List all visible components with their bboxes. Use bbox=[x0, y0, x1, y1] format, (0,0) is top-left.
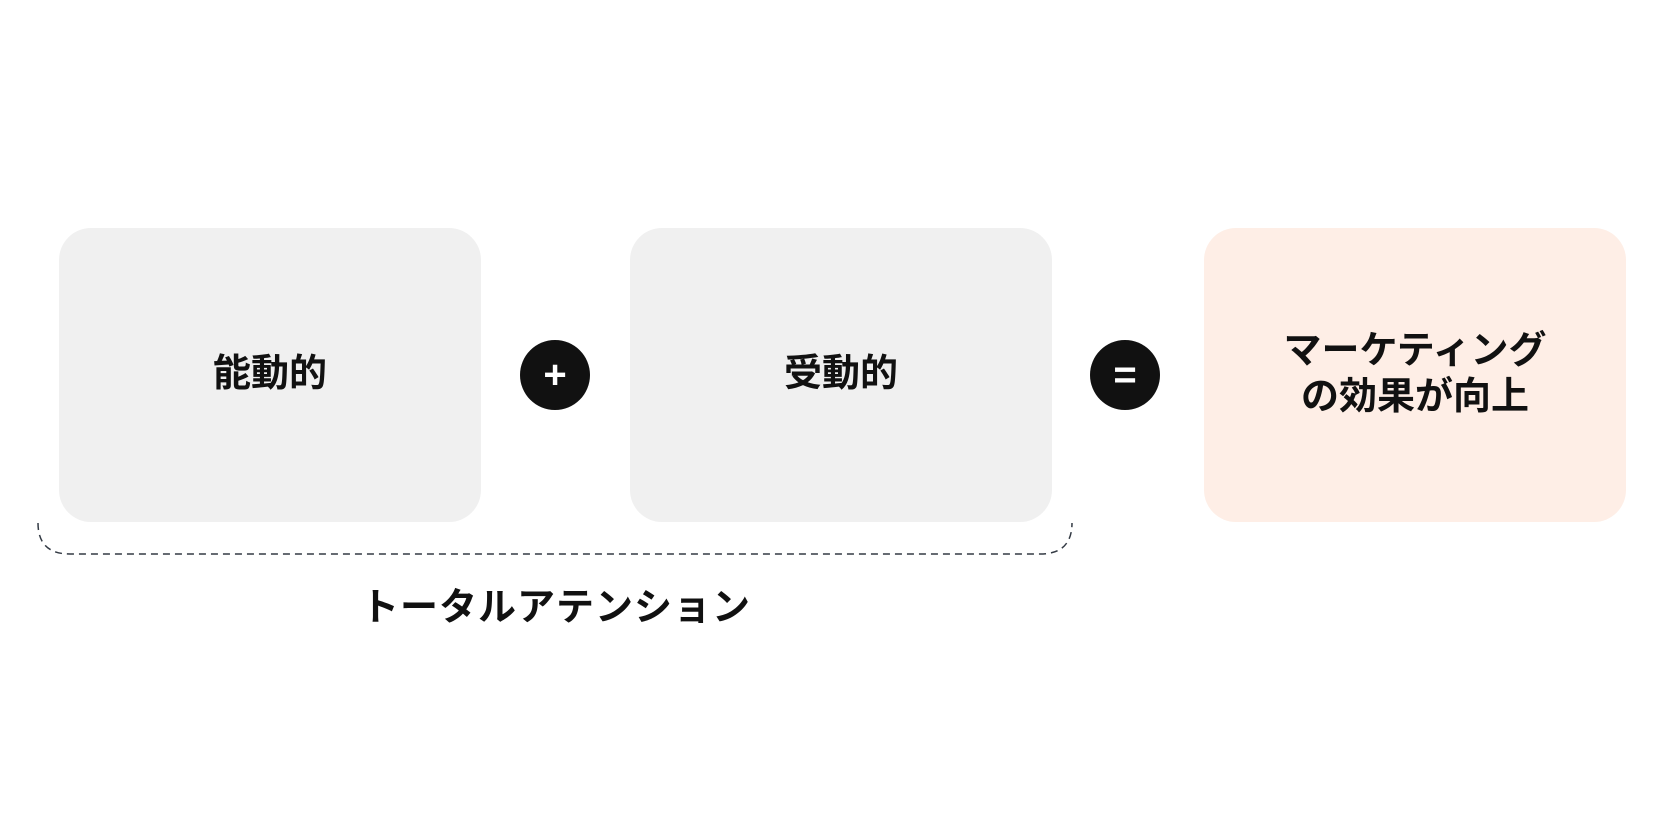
panel: passive: 受動的 bbox=[784, 353, 898, 395]
icon: equals: = bbox=[1113, 352, 1137, 396]
icon: equals bbox=[1090, 340, 1160, 410]
panel: result: マーケティング bbox=[1284, 330, 1546, 372]
panel: result bbox=[1204, 228, 1626, 522]
panel: active bbox=[59, 228, 481, 522]
label: total attention: トータルアテンション bbox=[361, 587, 751, 629]
icon: plus: + bbox=[543, 352, 567, 396]
panel: passive bbox=[630, 228, 1052, 522]
icon: plus bbox=[520, 340, 590, 410]
panel: result: の効果が向上 bbox=[1301, 376, 1529, 418]
panel: active: 能動的 bbox=[213, 353, 327, 395]
